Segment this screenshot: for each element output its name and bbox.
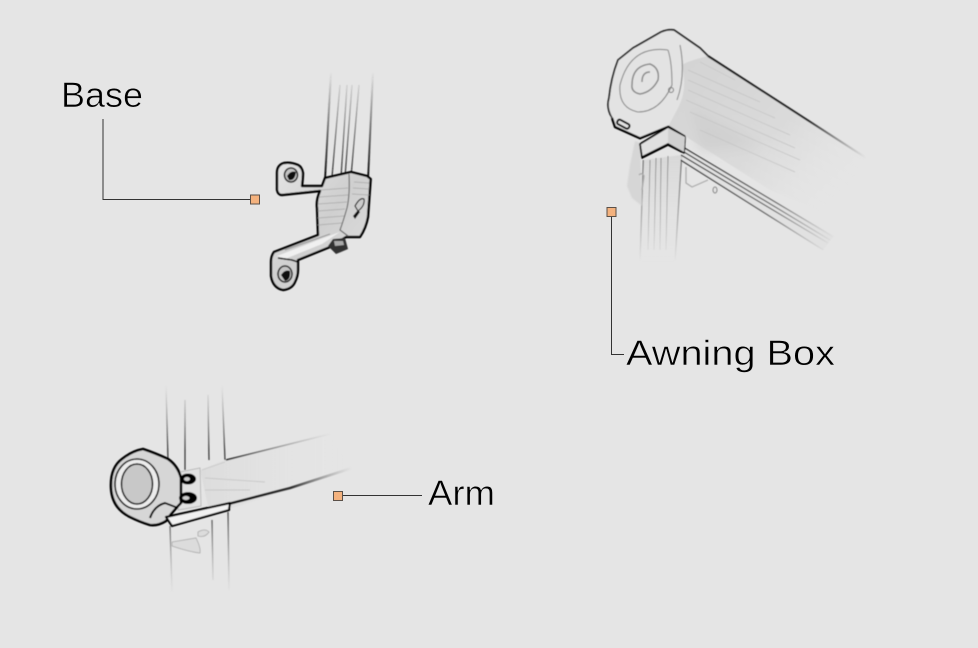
label: Awning Box: Awning Box [626,334,836,373]
bracket body [271,163,371,290]
leader line: Base [103,119,250,200]
bracket detail [318,182,369,225]
marker: Awning Box [607,208,616,216]
marker: Arm [334,492,342,500]
illustration: arm joint [111,385,352,592]
slots [180,474,196,484]
callout: Base [61,76,260,204]
lower tab [166,503,230,526]
top edge [708,56,867,158]
hub [111,449,181,525]
arm beam [200,434,352,515]
illustration: base bracket [271,72,373,290]
illustration: awning box [608,30,867,262]
plate [178,468,201,510]
leader line: Arm [343,494,422,496]
cap detail [620,45,682,112]
callout: Arm [334,474,495,513]
label: Base: Base [61,76,143,115]
side hook [627,141,642,206]
rail [680,148,833,250]
rail [325,72,373,180]
bracket collar [640,127,685,158]
vertical post [166,385,225,470]
post [640,155,681,262]
label: Arm: Arm [428,474,495,513]
screw [328,238,348,254]
box body [640,30,866,215]
end cap [608,30,708,138]
callout: Awning Box [607,208,836,373]
leader line: Awning Box [612,216,624,354]
bolts [284,168,298,182]
marker: Base [250,195,260,204]
